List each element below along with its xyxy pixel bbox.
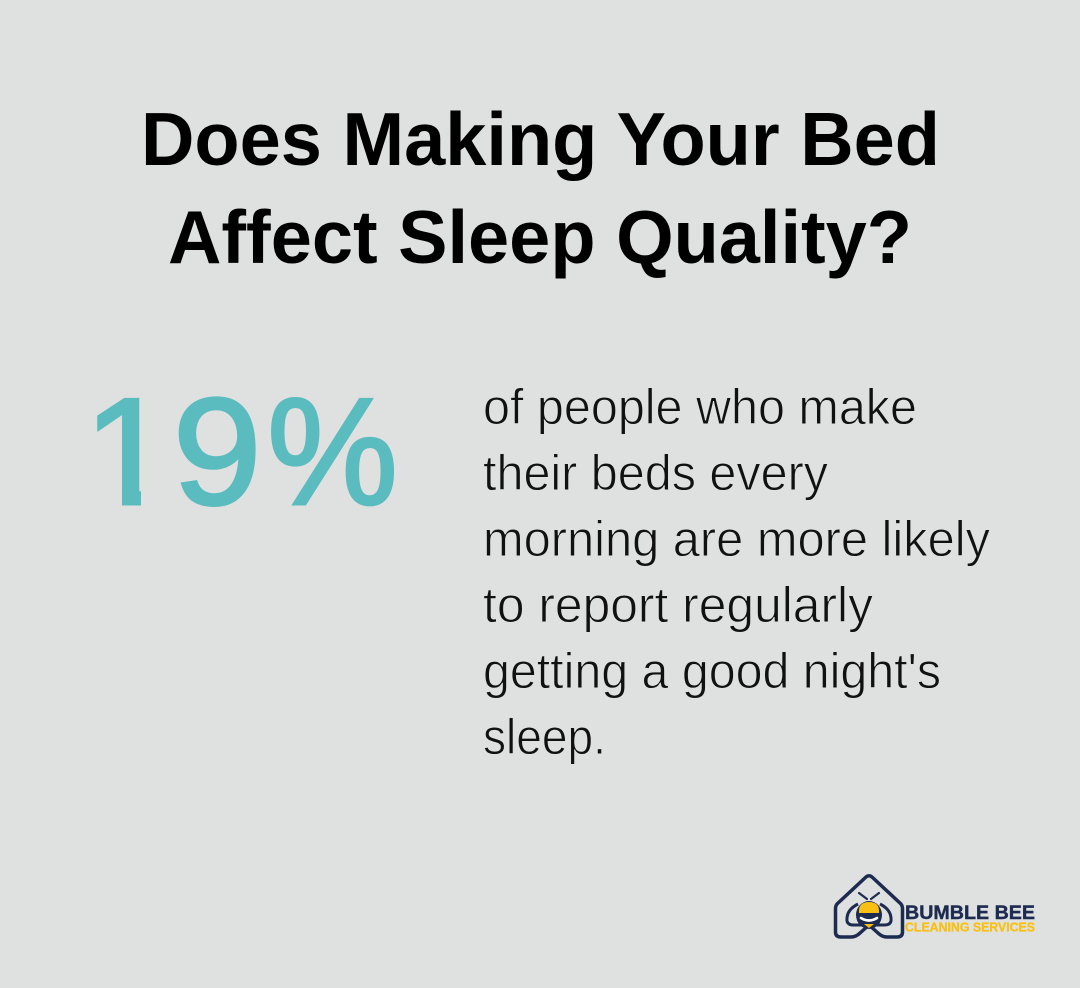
statistic description: their beds every [483,445,828,501]
big statistic: 19% [83,367,398,537]
logo wordmark: BUMBLE BEE [905,902,1035,924]
title: Affect Sleep Quality? [168,195,912,279]
logo tagline: CLEANING SERVICES [905,920,1035,934]
statistic description: of people who make [483,379,917,435]
title: Does Making Your Bed [141,97,940,181]
logo: Bumble Bee Cleaning Services [836,876,1035,937]
statistic description [483,379,990,765]
icon: house with bee [836,876,902,937]
statistic description: morning are more likely [483,511,990,567]
statistic description: sleep. [483,709,606,765]
title [141,97,940,279]
big statistic: 19%: % [267,367,398,537]
statistic description: to report regularly [483,577,873,633]
statistic description: getting a good night's [483,643,941,699]
big statistic: 19%: 19 [83,367,262,537]
